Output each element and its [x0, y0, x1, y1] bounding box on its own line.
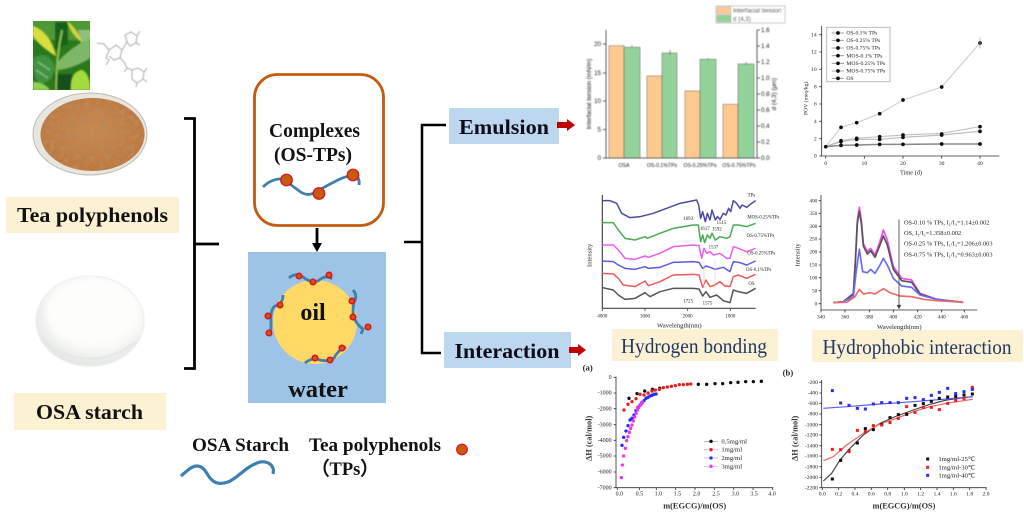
- legend: OS-0.1% TPs: [846, 31, 877, 37]
- FTIR spectra chart: [587, 194, 780, 330]
- legend: tea polyphenols: Tea polyphenols: [309, 436, 441, 456]
- legend: OS-0.75% TPs: [846, 46, 880, 52]
- label: interaction: Interaction: [454, 339, 560, 363]
- fluorescence spectra chart: Intensity: [794, 243, 801, 267]
- legend: OSA starch: OSA Starch: [192, 436, 290, 456]
- ITC chart (b): 0.8: [884, 492, 891, 498]
- line chart: POV over time: 0: [824, 161, 827, 167]
- legend: tea polyphenols: （TPs）: [311, 458, 379, 480]
- panel: complexes OS-TPs: (OS-TPs): [274, 145, 352, 166]
- ITC chart (b): -200: [808, 380, 818, 386]
- bar chart: interfacial tension and droplet size: 10: [594, 98, 602, 105]
- fluorescence spectra chart: 100: [809, 275, 818, 281]
- FTIR spectra chart: 3000: [640, 314, 650, 319]
- panel: oil droplet in water: oil: [300, 300, 326, 326]
- data points: [832, 387, 972, 479]
- ITC chart (b): -1000: [805, 422, 818, 428]
- ITC chart (b): 1.4: [933, 492, 941, 498]
- ITC chart (b): -2200: [805, 485, 818, 491]
- ITC chart (a): 3.5: [750, 492, 758, 498]
- ITC chart (a): 2.0: [693, 492, 700, 498]
- icon: polymer chain with polyphenols: [263, 169, 359, 199]
- ITC chart (a): 4.0: [768, 492, 776, 498]
- line chart: POV over time: 20: [900, 161, 906, 167]
- ITC chart (b): -1600: [805, 454, 818, 460]
- fluorescence spectra chart: 340: [817, 315, 825, 321]
- line chart: POV over time: 30: [939, 161, 945, 167]
- data points: [621, 381, 761, 478]
- bar chart: interfacial tension and droplet size: 0.6: [761, 107, 770, 114]
- line chart: POV over time: POV (meq/kg): [802, 82, 809, 115]
- ITC chart (b): -1400: [805, 443, 818, 449]
- spectra labels: OS-0.1%TPs: [746, 268, 771, 273]
- ITC chart (a): 2.5: [712, 492, 720, 498]
- ITC chart (b): 2.0: [982, 492, 990, 498]
- icon: tea leaf photo: [33, 21, 90, 90]
- legend: 1mg/ml: [721, 447, 742, 454]
- bars: [609, 46, 754, 158]
- legend: MOS-0.1% TPs: [846, 53, 882, 59]
- bar chart: interfacial tension and droplet size: OS-0.75%TPs: [722, 163, 756, 169]
- ITC chart (a): 1.5: [674, 492, 681, 498]
- ITC chart (b): [783, 368, 990, 510]
- line chart: POV over time: [802, 26, 999, 177]
- line chart: POV over time: 4: [814, 119, 817, 125]
- ITC chart (b): -800: [808, 412, 818, 418]
- line chart: POV over time: 10: [862, 161, 867, 167]
- spectra labels: 1693: [683, 217, 694, 222]
- legend: tea polyphenols: [309, 436, 467, 480]
- arrow: complexes to emulsion droplet: [312, 228, 322, 252]
- bar chart: interfacial tension and droplet size: OSA: [619, 163, 630, 169]
- axes: [819, 26, 999, 159]
- spectra labels: 1725: [683, 300, 694, 305]
- axes: [603, 30, 760, 158]
- axes: [614, 377, 773, 490]
- label: emulsion: Emulsion: [459, 115, 549, 139]
- bar chart: interfacial tension and droplet size: 1.6: [761, 27, 770, 34]
- legend: 1mg/ml-25℃: [938, 456, 976, 463]
- ITC chart (a): -2000: [598, 406, 612, 412]
- label: tea polyphenols: Tea polyphenols: [17, 203, 168, 227]
- spectra labels: 1575: [703, 302, 713, 307]
- line chart: POV over time: 10: [811, 67, 817, 73]
- ITC chart (a): 0.0: [616, 492, 623, 498]
- line chart: POV over time: 0: [814, 154, 817, 160]
- ITC chart (b): 0.4: [851, 492, 859, 498]
- fluorescence spectra chart: 460: [960, 315, 969, 321]
- fluorescence spectra chart: 50: [812, 288, 818, 294]
- ITC chart (a): -4000: [598, 438, 612, 444]
- fluorescence spectra chart: 360: [841, 315, 849, 321]
- bar chart: interfacial tension and droplet size: OS-0.1%TPs: [647, 163, 678, 169]
- line chart: POV over time: Time (d): [900, 170, 922, 177]
- legend: 1mg/ml-30℃: [938, 464, 976, 471]
- ITC chart (a): -3000: [598, 422, 612, 428]
- label: hydrophobic interaction: Hydrophobic interaction: [822, 335, 1012, 359]
- fluorescence spectra chart: 0: [815, 301, 818, 307]
- FTIR spectra chart: Wavelength(nm): [657, 323, 702, 330]
- arrow: pyrene marker: [897, 219, 901, 308]
- icon: polyphenol molecule: [97, 31, 147, 87]
- line chart: POV over time: 40: [977, 161, 983, 167]
- bar chart: interfacial tension and droplet size: 1.4: [761, 43, 770, 50]
- ITC chart (b): m(EGCG)/m(OS): [873, 501, 936, 510]
- panel: complexes OS-TPs: Complexes: [269, 121, 360, 142]
- panel: oil droplet in water: [248, 252, 386, 403]
- panel: oil droplet in water: water: [288, 376, 348, 403]
- spectra labels: TPs: [748, 194, 755, 199]
- spectra labels: MOS-0.25%TPs: [747, 216, 780, 221]
- legend: 2mg/ml: [721, 455, 742, 462]
- ITC chart (b): 1.8: [966, 492, 973, 498]
- label: OSA starch: [14, 393, 166, 430]
- icon: OSA starch bowl: [36, 276, 144, 366]
- legend: 1mg/ml-40℃: [938, 472, 976, 479]
- ITC chart (b): 1.2: [917, 492, 924, 498]
- line chart: POV over time: 6: [814, 102, 817, 108]
- arrow: emulsion: [557, 119, 575, 131]
- ITC chart (a): -7000: [598, 485, 612, 491]
- legend: [704, 438, 747, 470]
- spectra: [602, 200, 756, 303]
- bar chart: interfacial tension and droplet size: 0.4: [761, 123, 770, 130]
- ITC chart (b): 0.2: [835, 492, 842, 498]
- line chart: POV over time: 12: [811, 50, 817, 56]
- polymer chains on droplet: [270, 275, 363, 363]
- ITC chart (a): -1000: [598, 391, 612, 397]
- ITC chart (a): (a): [583, 362, 593, 372]
- bar chart: interfacial tension and droplet size: 0.8: [761, 91, 770, 98]
- fluorescence spectra chart: [794, 195, 993, 331]
- ITC chart (b): -2000: [805, 475, 818, 481]
- fluorescence spectra chart: 250: [809, 237, 818, 243]
- bar chart: interfacial tension and droplet size: 0: [598, 155, 602, 162]
- bar chart: interfacial tension and droplet size: Interfacial tension (mN/m): [586, 59, 593, 129]
- legend: [928, 456, 976, 479]
- label: emulsion: [449, 108, 559, 144]
- fluorescence spectra chart: 440: [938, 315, 946, 321]
- ratio annotations: OS-0.25 % TPs, I₁/I₃=1.206±0.003: [904, 241, 993, 248]
- bar chart: interfacial tension and droplet size: 1.0: [761, 75, 770, 82]
- legend: OSA starch: [181, 436, 290, 483]
- line chart: POV over time: 2: [814, 136, 817, 142]
- axes: [819, 380, 987, 490]
- spectra labels: OS-0.25%TPs: [747, 251, 775, 256]
- label: hydrogen bonding: Hydrogen bonding: [621, 334, 767, 358]
- fluorescence spectra chart: 150: [809, 263, 818, 269]
- spectra labels: [683, 194, 780, 307]
- ITC chart (b): -1200: [805, 433, 818, 439]
- FTIR spectra chart: 4000: [597, 314, 608, 319]
- fluorescence spectra chart: 380: [865, 315, 874, 321]
- bar chart: interfacial tension and droplet size: 0.0: [761, 155, 770, 162]
- ITC chart (a): -5000: [598, 454, 612, 460]
- legend: OS-0.25% TPs: [846, 38, 880, 44]
- FTIR spectra chart: Intensity: [587, 243, 594, 267]
- bar chart: interfacial tension and droplet size: 20: [594, 41, 602, 48]
- arrow: interaction: [569, 344, 586, 356]
- line chart: POV over time: 8: [814, 84, 817, 90]
- bar chart: interfacial tension and droplet size: 5: [598, 126, 602, 134]
- icon: tea polyphenol powder bowl: [33, 93, 147, 175]
- ITC chart (a): 0.5: [636, 492, 643, 498]
- right bracket: [404, 125, 446, 353]
- FTIR spectra chart: 1000: [725, 314, 736, 319]
- ITC chart (b): -400: [808, 391, 818, 397]
- ratio annotations: OS-0.75 % TPs, I₁/I₃=0.963±0.003: [904, 251, 993, 258]
- ITC chart (a): 1.0: [655, 492, 662, 498]
- bar chart: interfacial tension and droplet size: 1.2: [761, 59, 770, 66]
- legend: MOS-0.75% TPs: [846, 69, 885, 75]
- bar chart: interfacial tension and droplet size: 0.2: [761, 139, 770, 146]
- fit curves: [823, 397, 973, 481]
- fluorescence spectra chart: Wavelength(nm): [877, 324, 922, 331]
- ITC chart (a): 0: [609, 375, 612, 381]
- ratio annotations: OS, I₁/I₃=1.358±0.002: [904, 230, 961, 237]
- ITC chart (a): m(EGCG)/m(OS): [663, 501, 726, 510]
- ITC chart (a): 3.0: [732, 492, 739, 498]
- ITC chart (a): [583, 362, 776, 510]
- legend: [716, 6, 785, 23]
- ITC chart (b): -1800: [805, 464, 818, 470]
- label: interaction: [444, 332, 571, 368]
- ITC chart (b): 0.0: [819, 492, 826, 498]
- fluorescence spectra chart: 200: [809, 250, 818, 256]
- data series: [826, 37, 980, 147]
- ITC chart (b): (b): [783, 368, 793, 378]
- FTIR spectra chart: 2000: [683, 314, 693, 319]
- ITC chart (a): -6000: [598, 470, 612, 476]
- label: tea polyphenols: [6, 197, 179, 233]
- ITC chart (b): 1.6: [950, 492, 957, 498]
- bar chart: interfacial tension and droplet size: OS-0.25%TPs: [683, 163, 717, 169]
- fluorescence spectra chart: 300: [809, 224, 818, 230]
- spectra labels: 1515: [717, 221, 727, 226]
- label: OSA starch: OSA starch: [36, 400, 143, 424]
- legend: Interfacial tension: [733, 8, 782, 14]
- legend: MOS-0.25% TPs: [846, 61, 885, 67]
- spectra labels: 1617: [700, 227, 710, 232]
- spectra labels: 1537: [709, 245, 719, 250]
- fluorescence spectra chart: 420: [914, 315, 922, 321]
- spectra labels: 1592: [712, 228, 722, 233]
- legend: 3mg/ml: [721, 463, 742, 470]
- ITC chart (b): 0.6: [868, 492, 875, 498]
- legend: [827, 27, 890, 82]
- fluorescence spectra chart: 350: [809, 211, 818, 217]
- spectra: [833, 207, 963, 303]
- left bracket: [184, 118, 219, 368]
- spectra labels: OS: [748, 282, 755, 287]
- ITC chart (b): 1.0: [901, 492, 908, 498]
- ITC chart (a): ΔH (cal/mol): [584, 415, 593, 461]
- fluorescence spectra chart: 400: [889, 315, 898, 321]
- legend: d (4,3): [733, 16, 751, 23]
- legend: OS: [846, 76, 854, 82]
- polyphenol dots on droplet: [265, 272, 371, 363]
- fluorescence spectra chart: 400: [809, 198, 818, 204]
- ratio annotations: [904, 219, 993, 258]
- bar chart: interfacial tension and droplet size: d (4,3) (μm): [771, 78, 778, 110]
- ITC chart (b): -600: [808, 401, 818, 407]
- legend: 0.5mg/ml: [721, 438, 747, 445]
- panel: complexes OS-TPs: [254, 74, 384, 226]
- bar chart: interfacial tension and droplet size: [586, 6, 785, 169]
- axes: [602, 195, 756, 308]
- ITC chart (b): ΔH (cal/mol): [790, 415, 799, 461]
- axes: [819, 195, 977, 312]
- ratio annotations: OS-0.10 % TPs, I₁/I₃=1.14±0.002: [904, 219, 989, 226]
- spectra labels: OS-0.75%TPs: [747, 234, 775, 239]
- line chart: POV over time: 14: [811, 32, 817, 38]
- bar chart: interfacial tension and droplet size: 15: [594, 70, 602, 77]
